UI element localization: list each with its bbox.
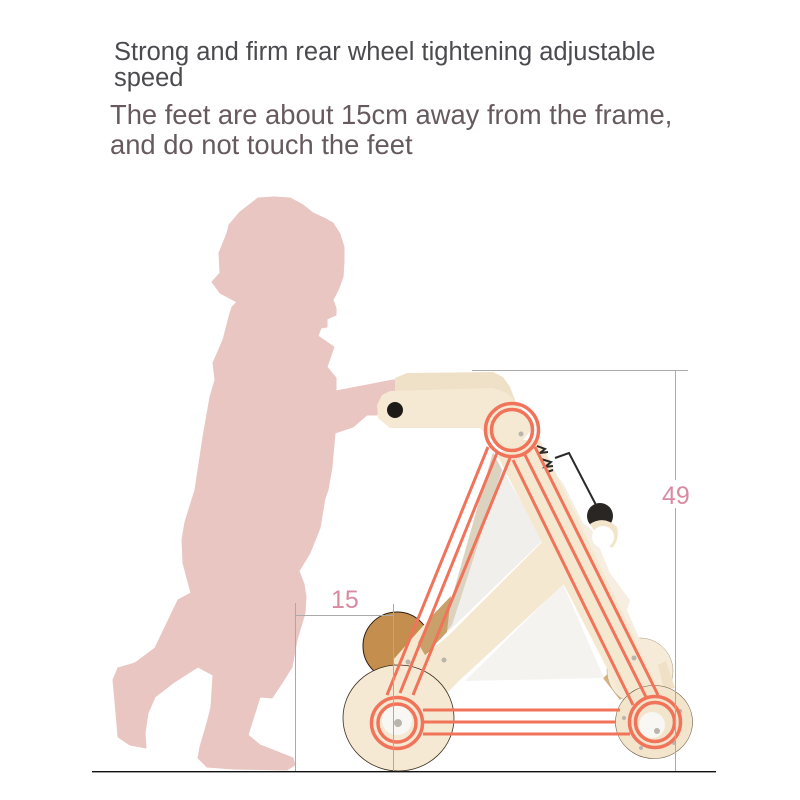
back handle	[395, 372, 517, 405]
cross bar	[393, 541, 565, 692]
text block: feet distance: and do not touch the feet	[110, 129, 413, 160]
right leg lines	[513, 447, 658, 705]
front wheel left	[343, 665, 454, 771]
ground line	[92, 771, 716, 772]
dimension 49	[472, 370, 690, 771]
red structural highlight	[372, 404, 680, 748]
dimension 15: 15	[331, 586, 359, 614]
upper white panel	[448, 465, 543, 632]
left leg lines	[387, 447, 510, 695]
child silhouette	[113, 197, 416, 770]
hubs	[382, 705, 665, 738]
left thin leg	[440, 452, 502, 640]
heading: rear wheel	[114, 38, 656, 92]
top joint circle	[486, 404, 538, 456]
right joint circle	[630, 696, 680, 748]
lower white panel	[465, 584, 604, 681]
front wheel right	[616, 686, 692, 758]
front handle	[377, 388, 535, 450]
handle knob	[387, 402, 403, 418]
bolts	[394, 432, 682, 750]
rear wheel left	[363, 612, 431, 680]
left joint circle	[372, 698, 422, 748]
dimension 49: 49	[662, 482, 690, 510]
text block: feet distance	[110, 99, 672, 160]
bead wire toy	[537, 446, 618, 548]
tan back of leg	[418, 596, 451, 655]
walker	[343, 372, 692, 771]
text block: feet distance: The feet are about 15cm away from the frame,	[110, 99, 672, 130]
heading: rear wheel: Strong and firm rear wheel tightening adjustable	[114, 38, 656, 66]
right main leg	[498, 440, 662, 715]
rear wheel right	[603, 638, 675, 704]
activity panel	[552, 470, 640, 640]
dimension 15	[295, 586, 394, 771]
heading: rear wheel: speed	[114, 64, 183, 92]
base lines	[423, 710, 630, 734]
